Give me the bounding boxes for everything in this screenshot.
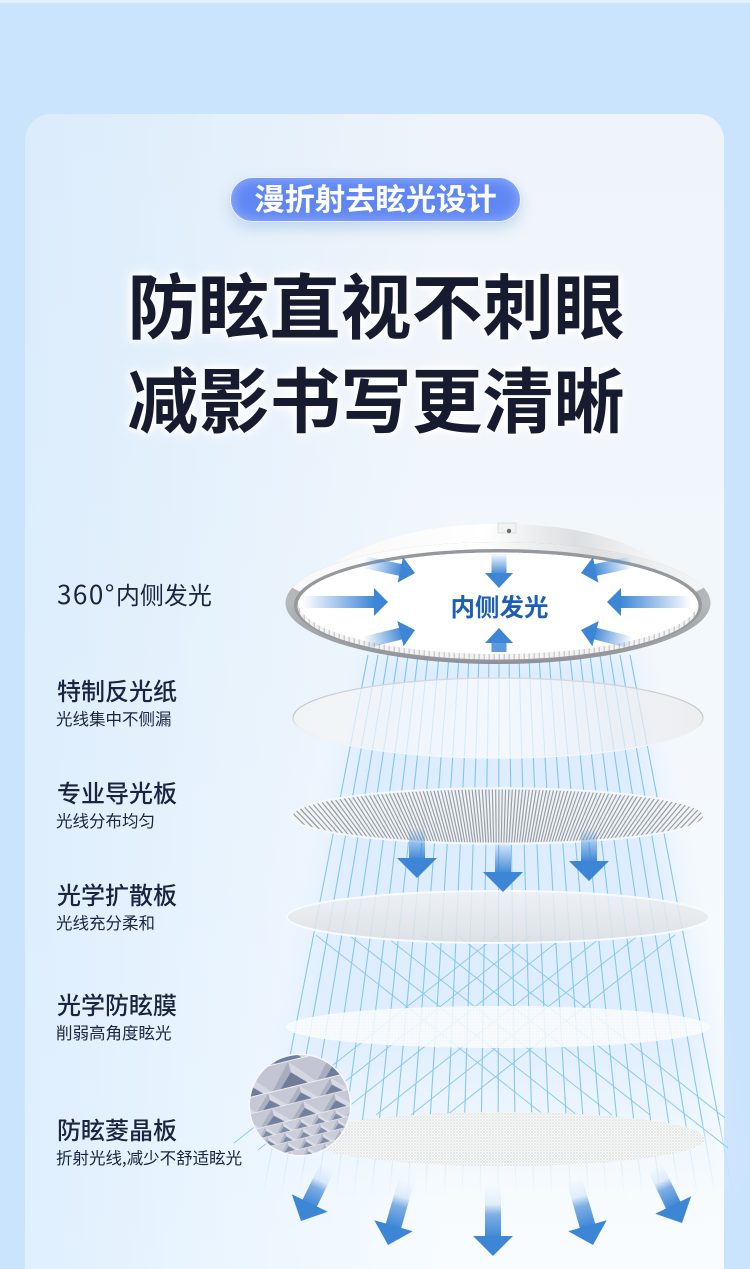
label: reflective paper: 特制反光纸 [57, 672, 177, 707]
label: light guide plate: 专业导光板 [57, 774, 177, 809]
light panel with LED strip [295, 550, 701, 662]
refracted light rays crossing [234, 935, 728, 1150]
label: diffuser plate: 光线充分柔和 [56, 910, 155, 934]
label: 360 inner glow: 360°内侧发光 [57, 575, 212, 612]
title line 1: 防眩直视不刺眼 [127, 270, 624, 349]
layer: diffuser plate disc [287, 891, 709, 943]
label: anti-glare film: 削弱高角度眩光 [56, 1020, 172, 1044]
label: reflective paper [56, 672, 177, 730]
label: diffuser plate: 光学扩散板 [57, 876, 177, 911]
back shell [335, 524, 668, 566]
badge: subtitle pill [230, 177, 521, 222]
lamp ring [285, 523, 711, 664]
layer: anti-glare film disc [286, 1006, 710, 1048]
layer: light guide plate disc [291, 787, 703, 845]
mount clip [498, 523, 516, 533]
label: anti-glare film: 光学防眩膜 [57, 986, 177, 1021]
top highlight strip [0, 0, 750, 3]
label: light guide plate: 光线分布均匀 [56, 808, 155, 832]
metal rim inner line [294, 549, 702, 661]
light rays vertical fan [262, 655, 734, 1200]
output arrows below plate [283, 1158, 700, 1256]
badge: subtitle pill: 漫折射去眩光设计 [254, 184, 497, 217]
light glow behind rays [262, 655, 734, 1200]
label: diamond crystal plate [56, 1111, 242, 1169]
label: diffuser plate [56, 876, 177, 934]
layer: diamond crystal plate disc [305, 1112, 705, 1166]
metal rim outer [286, 542, 710, 664]
lamp centre label: 内侧发光 [450, 594, 548, 622]
inward arrows on lamp panel [303, 549, 692, 655]
label: diamond crystal plate: 防眩菱晶板 [57, 1111, 177, 1146]
label: diamond crystal plate: 折射光线,减少不舒适眩光 [56, 1145, 242, 1169]
title line 2: 减影书写更清晰 [127, 364, 624, 443]
layer: reflective paper disc [293, 678, 703, 758]
magnified crystal plate circle [248, 1054, 352, 1156]
exploded lamp diagram [234, 522, 728, 1256]
label: light guide plate [56, 774, 177, 832]
label: reflective paper: 光线集中不侧漏 [56, 706, 172, 730]
downward arrows between plates [397, 828, 609, 892]
label: anti-glare film [56, 986, 177, 1044]
front shell band [292, 542, 704, 592]
